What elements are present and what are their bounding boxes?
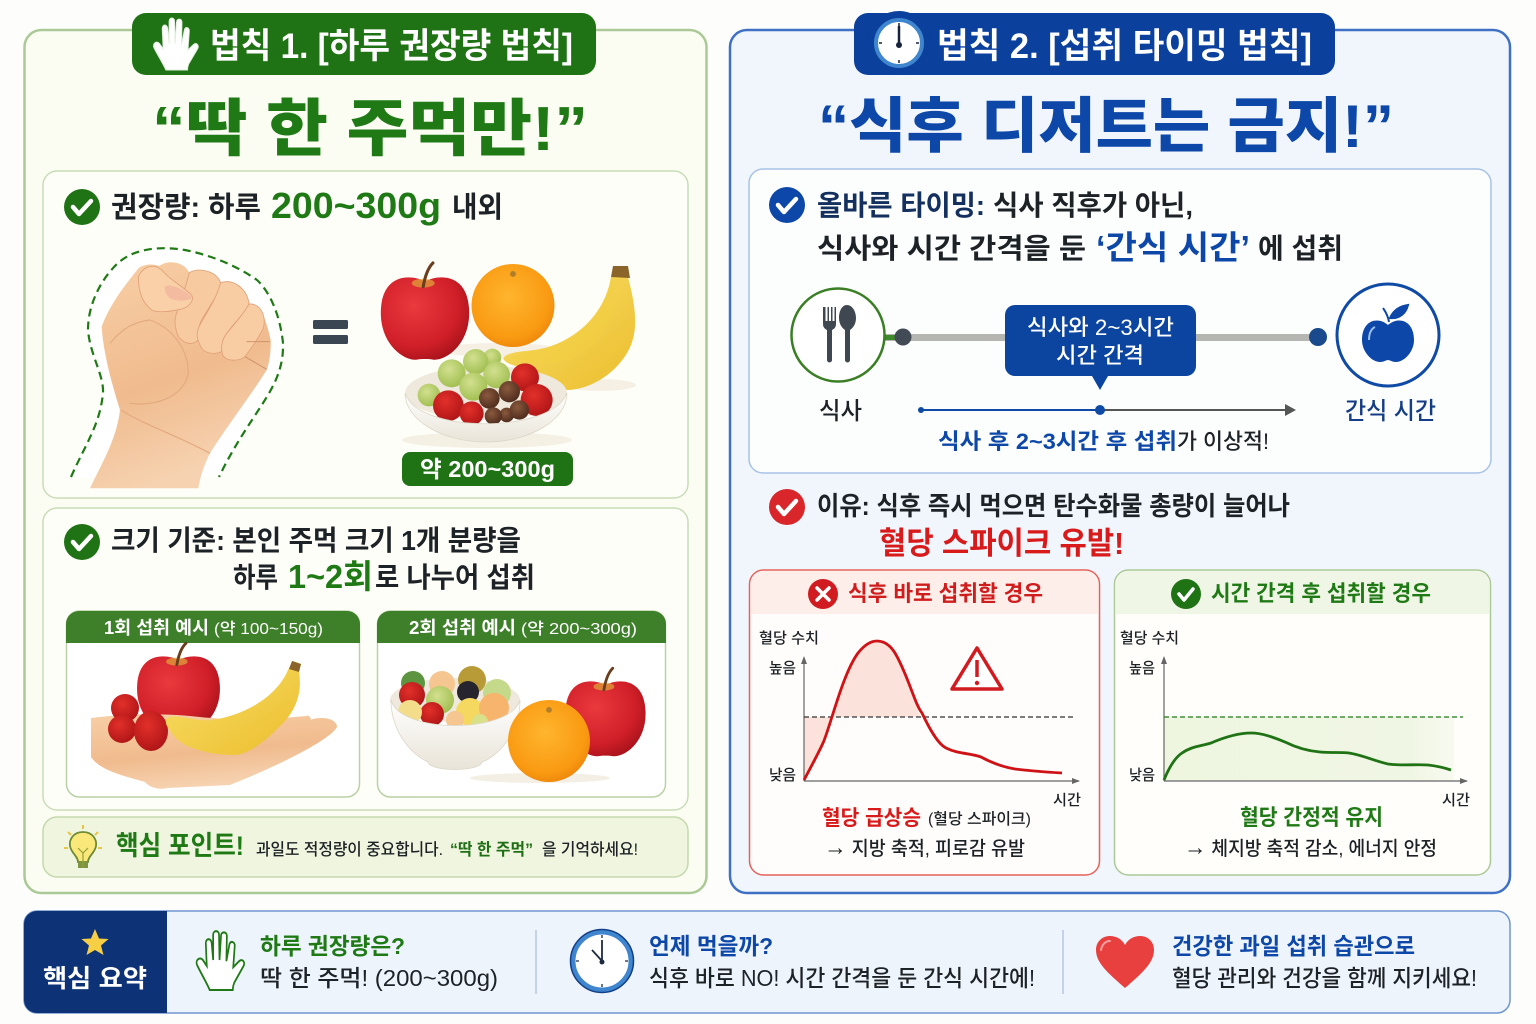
timing note (938, 429, 1269, 454)
correct timing text: 올바른 타이밍: (817, 190, 985, 221)
summary item: healthy habit (1096, 933, 1477, 991)
summary item: daily amount: 하루 권장량은? (260, 933, 405, 959)
rule 2 header text: 법칙 2. [섭취 타이밍 법칙] (937, 27, 1312, 66)
rule 1 headline: “딱 한 주먹만!” (152, 95, 588, 164)
line chart: blood sugar spike: 낮음 (769, 767, 796, 784)
key point text (256, 840, 638, 859)
line chart: stable blood sugar: 낮음 (1129, 767, 1155, 784)
timing note: 식사 후 2~3시간 후 섭취 (938, 429, 1177, 454)
illustration: hand with fruit (91, 643, 337, 789)
line chart: blood sugar spike: 혈당 수치 (759, 630, 819, 647)
line chart: stable blood sugar (1120, 630, 1470, 809)
callout: 2~3 hours (1005, 305, 1196, 390)
summary item: when to eat: 언제 먹을까? (649, 933, 773, 959)
rule 2 header pill (854, 11, 1335, 75)
immediate result (822, 807, 1031, 861)
reason block (769, 489, 1290, 561)
card: recommended amount (43, 171, 688, 498)
delayed result: 혈당 간정적 유지 (1240, 805, 1383, 830)
summary item: healthy habit: 건강한 과일 섭취 습관으로 (1172, 933, 1415, 959)
example header 1 (66, 611, 360, 643)
summary item: when to eat (570, 930, 1035, 992)
recommended amount text (111, 185, 503, 226)
key point text: “딱 한 주먹” (450, 840, 533, 859)
immediate result: (혈당 스파이크) (928, 810, 1031, 828)
timeline diagram (792, 284, 1439, 454)
icon: check (64, 189, 100, 225)
summary item: healthy habit: 혈당 관리와 건강을 함께 지키세요! (1172, 965, 1477, 991)
icon: green check (1171, 579, 1201, 609)
reason highlight: 혈당 스파이크 유발! (879, 526, 1124, 561)
illustration: fruits (381, 263, 636, 448)
label: meal: 식사 (819, 398, 862, 425)
size standard text: 1~2회 (288, 558, 373, 595)
correct timing text: ‘간식 시간’ (1096, 229, 1250, 266)
immediate result: → 지방 축적, 피로감 유발 (824, 834, 1025, 861)
summary bar (24, 911, 1510, 1013)
example card: 1 serving (66, 611, 360, 797)
size standard text: 하루 (233, 562, 278, 593)
equals sign (313, 320, 348, 344)
example header 2: (약 200~300g) (521, 620, 637, 638)
icon: heart (1096, 936, 1154, 988)
callout: key point (43, 817, 688, 877)
icon: clock (570, 930, 634, 992)
icon: clock (867, 11, 931, 75)
label: snack time: 간식 시간 (1345, 398, 1436, 425)
illustration: fist (71, 248, 283, 488)
correct timing text (817, 190, 1343, 266)
line chart: blood sugar spike: 시간 (1053, 792, 1081, 809)
icon: blue check (769, 187, 805, 223)
rule 1 header text: 법칙 1. [하루 권장량 법칙] (210, 27, 573, 66)
line chart: blood sugar spike (759, 630, 1081, 809)
rule 1 header pill (132, 13, 596, 75)
recommended amount text: 내외 (452, 191, 503, 224)
correct timing text: 식사와 시간 간격을 둔 (817, 233, 1086, 264)
icon: warning (952, 648, 1002, 689)
example header 2 (377, 611, 666, 643)
panel: rule 2 (730, 11, 1510, 893)
example card: 2 servings (377, 611, 666, 797)
icon: hand outline (197, 931, 244, 990)
card: size standard (43, 508, 688, 810)
summary label: 핵심 요약 (43, 965, 147, 993)
panel: immediate intake chart (750, 570, 1100, 875)
size standard text (111, 525, 535, 595)
icon: apple snack (1337, 284, 1439, 386)
example header 1: 1회 섭취 예시 (104, 618, 209, 638)
key point heading: 핵심 포인트! (116, 831, 244, 861)
delayed heading: 시간 간격 후 섭취할 경우 (1211, 581, 1431, 606)
panel: delayed intake chart (1114, 570, 1490, 875)
summary item: daily amount (197, 931, 498, 991)
callout: 2~3 hours: 시간 간격 (1056, 343, 1144, 368)
size standard text: 크기 기준: 본인 주먹 크기 1개 분량을 (111, 525, 521, 556)
correct timing text: 에 섭취 (1258, 233, 1343, 264)
arrow: time line (918, 404, 1296, 416)
key point text: 과일도 적정량이 중요합니다. (256, 840, 443, 859)
summary label (24, 911, 167, 1013)
illustration: bowl and fruit (390, 666, 646, 783)
amount label (402, 452, 573, 486)
line chart: blood sugar spike: 높음 (769, 660, 796, 677)
summary item: daily amount: 딱 한 주먹! (200~300g) (260, 965, 498, 991)
delayed result (1184, 805, 1437, 861)
example header 2: 2회 섭취 예시 (409, 618, 516, 638)
icon: meal (792, 288, 884, 382)
panel: rule 1 (24, 13, 706, 893)
icon: light bulb (64, 825, 102, 868)
amount label: 약 200~300g (420, 456, 555, 482)
icon: red check (769, 489, 805, 525)
card: correct timing (749, 169, 1491, 473)
summary item: when to eat: 식후 바로 NO! 시간 간격을 둔 간식 시간에! (649, 965, 1035, 991)
reason text: 이유: 식후 즉시 먹으면 탄수화물 총량이 늘어나 (817, 491, 1290, 521)
icon: check (64, 524, 100, 560)
key point text: 을 기억하세요! (542, 840, 638, 859)
immediate heading: 식후 바로 섭취할 경우 (848, 581, 1043, 606)
timing note: 가 이상적! (1177, 429, 1269, 454)
immediate result: 혈당 급상승 (822, 807, 921, 830)
delayed result: → 체지방 축적 감소, 에너지 안정 (1184, 834, 1437, 861)
icon: open hand (153, 18, 198, 70)
line chart: stable blood sugar: 혈당 수치 (1120, 630, 1179, 647)
correct timing text: 식사 직후가 아닌, (993, 190, 1193, 221)
rule 2 headline: “식후 디저트는 금지!” (818, 93, 1394, 160)
icon: x mark (808, 579, 838, 609)
recommended amount text: 권장량: 하루 (111, 191, 261, 224)
line chart: stable blood sugar: 높음 (1129, 660, 1155, 677)
line chart: stable blood sugar: 시간 (1442, 792, 1470, 809)
callout: 2~3 hours: 식사와 2~3시간 (1027, 315, 1174, 340)
example header 1: (약 100~150g) (214, 620, 323, 638)
size standard text: 로 나누어 섭취 (375, 562, 535, 593)
recommended amount text: 200~300g (271, 185, 441, 226)
